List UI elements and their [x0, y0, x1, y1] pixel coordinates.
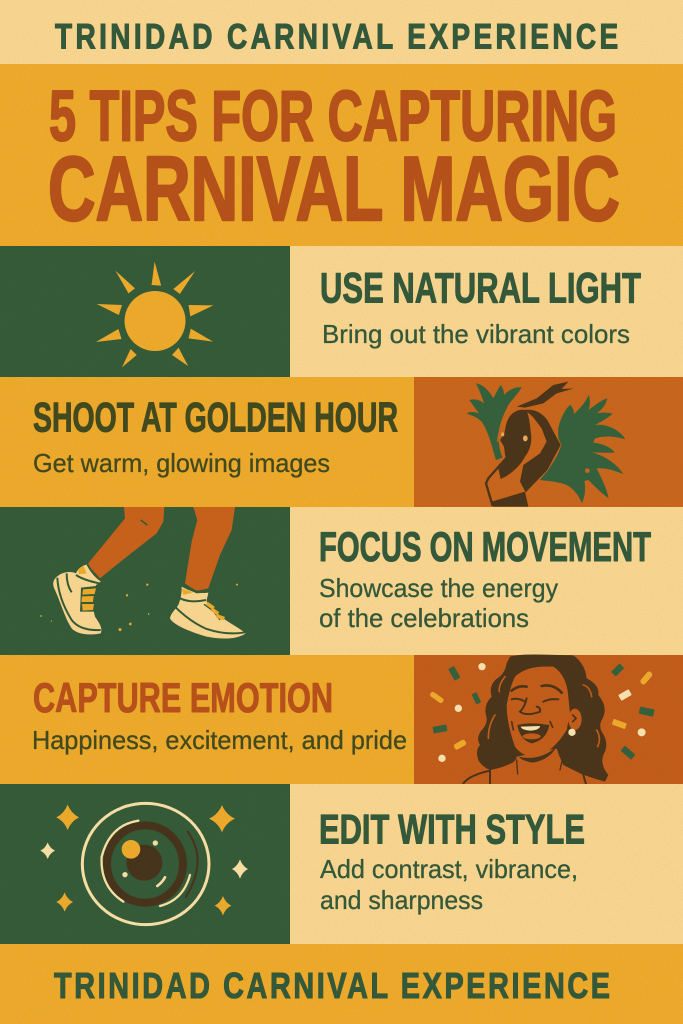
footer banner — [0, 944, 683, 1024]
text: tip 3 description — [319, 573, 558, 633]
icon: sun — [96, 262, 213, 367]
text: tip 2 description: Get warm, glowing images — [33, 448, 330, 478]
footer banner: TRINIDAD CARNIVAL EXPERIENCE — [54, 965, 610, 1006]
heading: edit with style: EDIT WITH STYLE — [319, 806, 585, 852]
text: tip 1 description: Bring out the vibrant colors — [322, 319, 630, 349]
panel: tip 3 movement — [0, 507, 683, 655]
heading: capture emotion: CAPTURE EMOTION — [33, 674, 333, 721]
heading: shoot at golden hour: SHOOT AT GOLDEN HOUR — [33, 394, 398, 440]
green confetti — [433, 663, 655, 760]
icon: running legs and sneakers — [40, 507, 246, 639]
text: tip 5 description — [320, 854, 578, 915]
panel: tip 1 natural light — [0, 246, 683, 377]
icon: laughing woman with confetti — [429, 655, 655, 784]
yellow confetti — [429, 670, 653, 750]
text: tip 5 description: and sharpness — [320, 885, 483, 915]
icon: camera lens with sparkles — [40, 803, 248, 925]
panel: tip 2 golden hour — [0, 377, 683, 507]
top banner: TRINIDAD CARNIVAL EXPERIENCE — [55, 16, 618, 56]
text: tip 3 description: of the celebrations — [319, 603, 529, 633]
panel: tip 4 emotion — [0, 655, 683, 784]
text: tip 4 description: Happiness, excitement, and pride — [32, 725, 407, 755]
cream confetti — [438, 663, 646, 762]
text: tip 5 description: Add contrast, vibrance, — [320, 854, 578, 884]
text: tip 3 description: Showcase the energy — [319, 573, 558, 603]
panel: tip 5 editing — [0, 784, 683, 944]
icon: carnival dancer — [467, 382, 625, 507]
title panel — [0, 64, 683, 246]
top banner — [0, 0, 683, 64]
